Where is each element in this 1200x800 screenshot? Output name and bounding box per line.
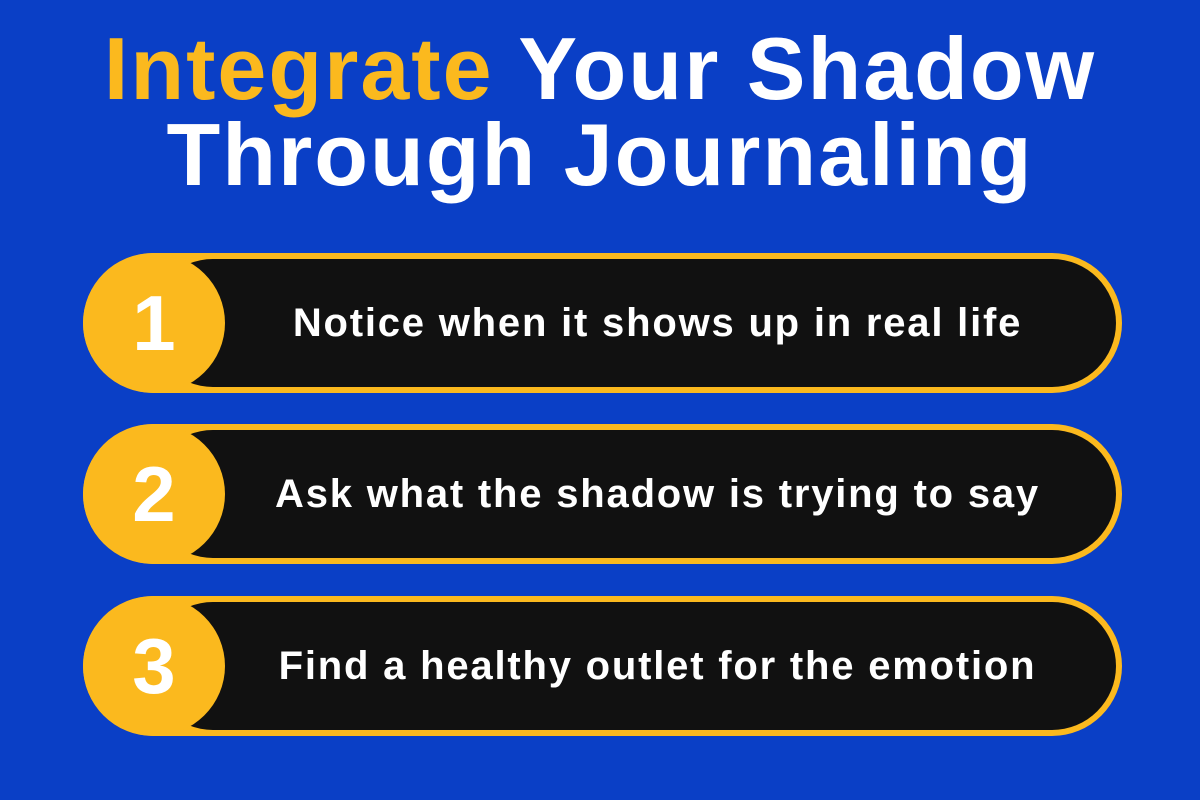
number 3: 3 [132, 622, 176, 710]
number 3 [83, 596, 225, 736]
number 1: 1 [132, 279, 176, 367]
title [104, 19, 1096, 204]
step 1 text: Notice when it shows up in real life [293, 301, 1022, 345]
number 1 [83, 253, 225, 393]
step 1 [83, 253, 1122, 393]
title: Through Journaling [166, 105, 1034, 204]
step 3 [83, 596, 1122, 736]
step 3 text: Find a healthy outlet for the emotion [279, 644, 1036, 688]
number 2 [83, 424, 225, 564]
step 2 [83, 424, 1122, 564]
step 2 text: Ask what the shadow is trying to say [275, 472, 1040, 516]
number 2: 2 [132, 450, 176, 538]
title: Integrate Your Shadow [104, 19, 1096, 118]
